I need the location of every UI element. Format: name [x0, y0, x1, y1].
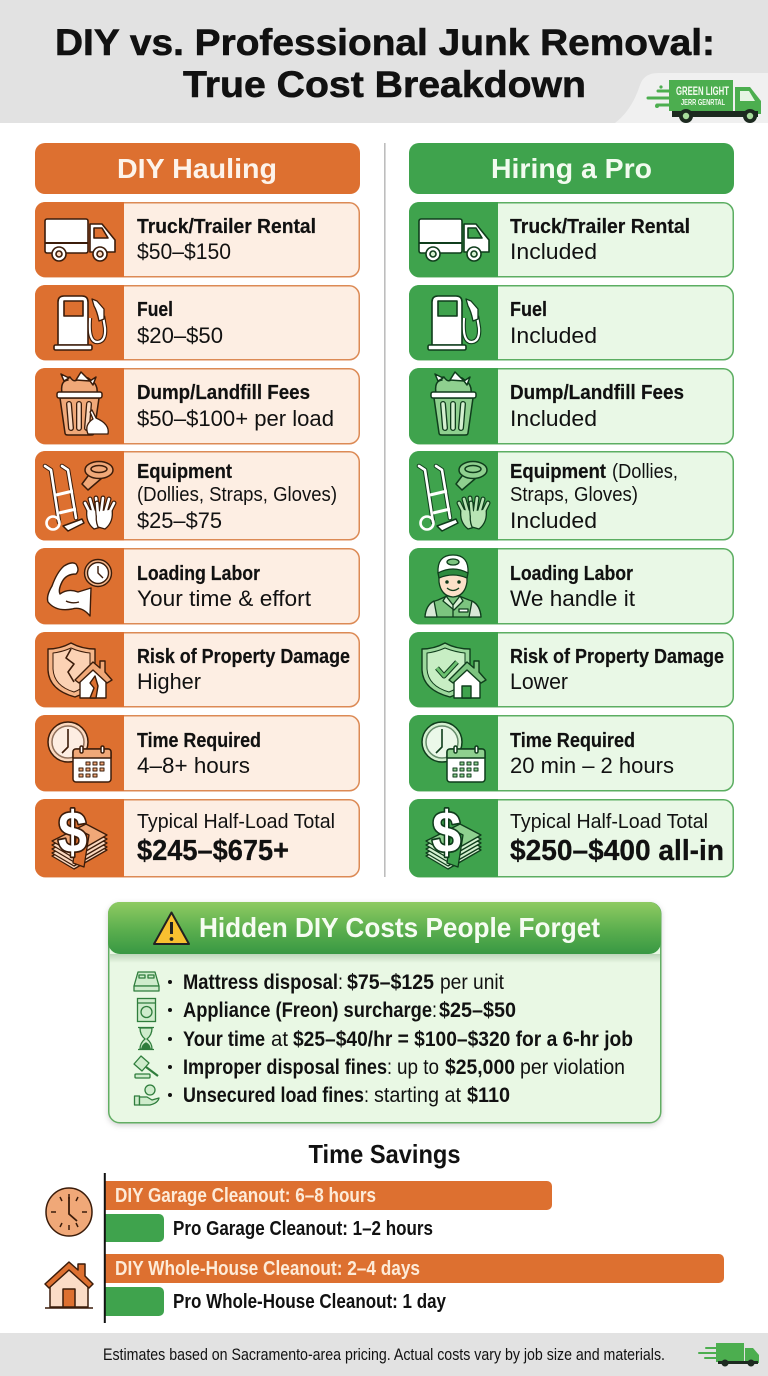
title	[55, 22, 715, 105]
list item: your time: $25–$40/hr = $100–$320 for a 6-hr job	[293, 1028, 633, 1051]
row: Risk of Property Damage: Lower	[510, 669, 568, 694]
panel: DIY Hauling column	[35, 143, 360, 877]
row: Equipment: Equipment	[510, 461, 606, 483]
panel: Hidden DIY Costs	[108, 902, 661, 1123]
row: Equipment: Straps, Gloves)	[510, 484, 638, 506]
icon: cracked shield and house	[48, 643, 112, 698]
bar: DIY garage cleanout	[105, 1181, 552, 1210]
footer: Estimates based on Sacramento-area pricing. Actual costs vary by job size and materials.	[103, 1346, 665, 1364]
title: DIY vs. Professional Junk Removal:	[55, 22, 715, 63]
row: Equipment: Equipment	[137, 461, 232, 483]
icon: hourglass	[138, 1028, 154, 1050]
row: Time Required: 4–8+ hours	[137, 753, 250, 778]
row: Typical Half-Load Total: $245–$675+	[137, 835, 289, 867]
icon: bed	[134, 972, 159, 991]
list item: your time: at	[271, 1028, 288, 1051]
row: Truck/Trailer Rental: Truck/Trailer Rental	[137, 216, 316, 238]
bar: Pro whole-house cleanout: Pro Whole-House Cleanout: 1 day	[173, 1291, 447, 1313]
icon: gavel	[134, 1056, 158, 1078]
row: Time Required: Time Required	[510, 730, 635, 752]
list item: unsecured load fines: :	[364, 1084, 369, 1107]
row: Equipment: (Dollies, Straps, Gloves)	[137, 484, 337, 506]
heading: Hidden DIY Costs People Forget: Hidden DIY Costs People Forget	[199, 912, 600, 943]
row: Dump/Landfill Fees: Included	[510, 406, 597, 431]
row: Typical Half-Load Total	[35, 799, 359, 877]
icon: shield with check and house	[422, 643, 486, 698]
row: Risk of Property Damage: Risk of Property Damage	[137, 646, 350, 668]
chart: Time Savings	[45, 1139, 724, 1323]
list item: unsecured load fines	[134, 1084, 510, 1107]
row: Equipment: Included	[510, 508, 597, 533]
row: Dump/Landfill Fees: $50–$100+ per load	[137, 406, 334, 431]
row: Equipment	[35, 451, 359, 540]
bar: DIY whole-house cleanout: DIY Whole-House Cleanout: 2–4 days	[115, 1258, 420, 1280]
heading: DIY Hauling: DIY Hauling	[117, 153, 277, 184]
list item: mattress disposal: $75–$125	[347, 971, 434, 994]
row: Time Required: Time Required	[137, 730, 261, 752]
list item: unsecured load fines: starting at	[374, 1084, 461, 1107]
list item: appliance surcharge: $25–$50	[439, 999, 516, 1022]
logo: green truck	[615, 73, 768, 123]
list item: improper disposal fines: Improper disposal fines	[183, 1056, 387, 1079]
list item: unsecured load fines: Unsecured load fines	[183, 1084, 364, 1107]
row: Loading Labor	[409, 548, 733, 624]
heading: Hidden DIY Costs People Forget	[108, 902, 661, 954]
row: Time Required: 20 min – 2 hours	[510, 753, 674, 778]
row: Risk of Property Damage	[35, 632, 359, 707]
list item: mattress disposal: per unit	[440, 971, 504, 994]
row: Truck/Trailer Rental	[35, 202, 359, 277]
heading: Hiring a Pro: Hiring a Pro	[491, 153, 652, 184]
list item: appliance surcharge: Appliance (Freon) surcharge	[183, 999, 432, 1022]
header band	[0, 0, 768, 123]
bar: DIY whole-house cleanout	[105, 1254, 724, 1283]
icon: washer	[138, 998, 156, 1022]
row: Risk of Property Damage: Risk of Property Damage	[510, 646, 724, 668]
list item: improper disposal fines: up to	[397, 1056, 439, 1079]
title: True Cost Breakdown	[183, 64, 586, 105]
icon: flexed arm and clock	[48, 560, 112, 616]
row: Fuel: Included	[510, 323, 597, 348]
row: Fuel: Fuel	[137, 299, 173, 321]
row: Time Required	[35, 715, 359, 791]
list item: improper disposal fines: :	[387, 1056, 392, 1079]
row: Typical Half-Load Total: $250–$400 all-in	[510, 835, 724, 867]
row: Fuel: Fuel	[510, 299, 547, 321]
row: Risk of Property Damage	[409, 632, 733, 707]
row: Loading Labor	[35, 548, 359, 624]
icon: clock	[46, 1188, 92, 1236]
row: Dump/Landfill Fees	[409, 368, 733, 444]
row: Dump/Landfill Fees	[35, 368, 359, 444]
icon: hand with coin	[134, 1085, 159, 1105]
row: Truck/Trailer Rental: Truck/Trailer Rental	[510, 216, 690, 238]
list item: improper disposal fines: $25,000	[445, 1056, 515, 1079]
logo: green truck: JERR GENRTAL	[681, 98, 725, 107]
row: Time Required	[409, 715, 733, 791]
row: Typical Half-Load Total: Typical Half-Load Total	[510, 811, 708, 833]
row: Fuel: $20–$50	[137, 323, 223, 348]
row: Loading Labor: We handle it	[510, 586, 635, 611]
list item: unsecured load fines: $110	[467, 1084, 510, 1107]
row: Equipment	[409, 451, 733, 540]
row: Typical Half-Load Total	[409, 799, 733, 877]
list item: improper disposal fines: per violation	[520, 1056, 625, 1079]
list item: mattress disposal: Mattress disposal	[183, 971, 338, 994]
icon: footer truck	[699, 1343, 759, 1366]
icon: uniformed worker	[425, 555, 481, 617]
row: Loading Labor: Loading Labor	[137, 563, 260, 585]
list item: mattress disposal	[134, 971, 504, 994]
heading: DIY Hauling	[35, 143, 360, 194]
list item: appliance surcharge: :	[432, 999, 437, 1022]
list item: your time	[138, 1028, 633, 1051]
row: Dump/Landfill Fees: Dump/Landfill Fees	[510, 382, 684, 404]
row: Truck/Trailer Rental: $50–$150	[137, 239, 231, 264]
row: Loading Labor: Your time & effort	[137, 586, 311, 611]
row: Risk of Property Damage: Higher	[137, 669, 201, 694]
row: Fuel	[35, 285, 359, 360]
panel: Hiring a Pro column	[409, 143, 734, 877]
column divider	[384, 143, 386, 877]
bar: Pro garage cleanout: Pro Garage Cleanout: 1–2 hours	[173, 1218, 433, 1240]
list item: improper disposal fines	[134, 1056, 625, 1079]
row: Typical Half-Load Total: Typical Half-Load Total	[137, 811, 335, 833]
row: Equipment: (Dollies,	[612, 461, 678, 483]
bar: DIY garage cleanout: DIY Garage Cleanout: 6–8 hours	[115, 1185, 376, 1207]
row: Truck/Trailer Rental	[409, 202, 733, 277]
row: Typical Half-Load Total: $	[58, 800, 87, 865]
row: Fuel	[409, 285, 733, 360]
footer	[0, 1333, 768, 1376]
list item: mattress disposal: :	[338, 971, 343, 994]
row: Dump/Landfill Fees: Dump/Landfill Fees	[137, 382, 310, 404]
icon: warning triangle	[154, 912, 189, 944]
heading: Hiring a Pro	[409, 143, 734, 194]
logo: green truck: GREEN LIGHT	[676, 84, 729, 98]
chart heading: Time Savings	[308, 1139, 460, 1169]
row: Loading Labor: Loading Labor	[510, 563, 633, 585]
row: Equipment: $25–$75	[137, 508, 222, 533]
list item: your time: Your time	[183, 1028, 265, 1051]
icon: house	[45, 1262, 93, 1308]
row: Truck/Trailer Rental: Included	[510, 239, 597, 264]
bar: Pro whole-house cleanout	[105, 1287, 447, 1316]
row: Typical Half-Load Total: $	[432, 800, 461, 865]
bar: Pro garage cleanout	[105, 1214, 433, 1242]
